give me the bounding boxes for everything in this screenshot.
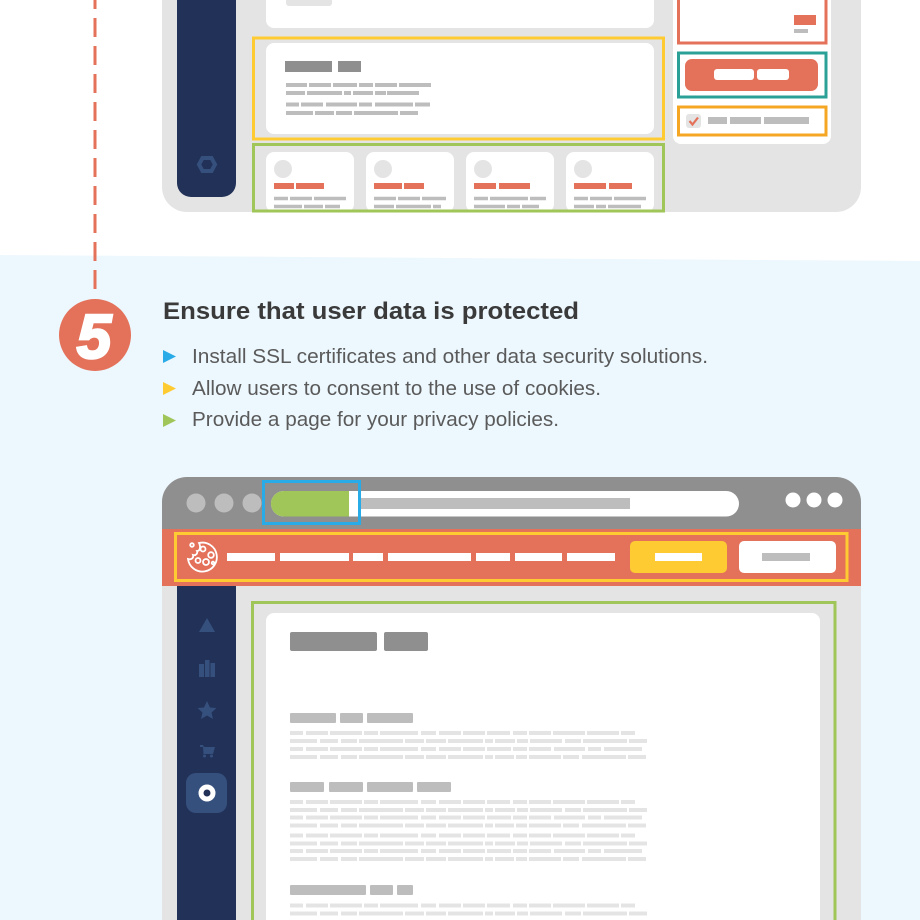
icon: triangle [199,618,215,632]
icon: yellow bullet [163,382,176,395]
icon: cart [200,745,215,758]
card: top content card [266,0,654,28]
icon: blue bullet [163,350,176,363]
policy section three [290,885,647,914]
icon: settings hexagon [199,158,215,171]
icon: cookie [188,543,217,572]
card: privacy policy page [266,613,820,920]
panel: previous step browser mockup [162,0,861,212]
highlight: green product cards row [254,144,664,212]
icon: star [198,701,216,719]
icon: bar chart [199,660,215,677]
text: bullet three: Provide a page for your privacy policies. [192,409,559,431]
icon: step number 5: 5 [77,303,113,372]
panel: browser mockup [162,477,861,920]
button: accept [630,541,727,573]
icon: privacy nav item selected [186,773,227,813]
policy section two [290,782,647,859]
cookie consent bar [162,529,861,586]
policy section one [290,713,647,757]
page title [290,632,428,651]
panel: step 5 background [0,255,920,920]
panel: right purchase column [673,0,831,144]
sidebar: navy navigation [177,0,236,197]
highlight: green privacy page frame [252,602,835,920]
address bar with secure indicator [271,491,739,516]
list: step 5 bullets [163,346,708,431]
highlight: red price box [678,0,826,43]
button: decline [739,541,836,573]
arrow: dashed step connector [94,0,96,289]
highlight: teal call-to-action button [678,53,826,97]
highlight: blue SSL box [264,482,360,524]
highlight: yellow description block [254,38,664,139]
icon: step number 5 [59,299,131,372]
text: bullet one: Install SSL certificates and other data security solutions. [192,346,708,368]
icon: green bullet [163,414,176,427]
heading: step title: Ensure that user data is protected [163,298,579,325]
sidebar: navy navigation [177,586,236,920]
text: bullet two: Allow users to consent to the use of cookies. [192,378,601,400]
highlight: orange consent checkbox [678,107,826,135]
browser toolbar [162,477,861,529]
